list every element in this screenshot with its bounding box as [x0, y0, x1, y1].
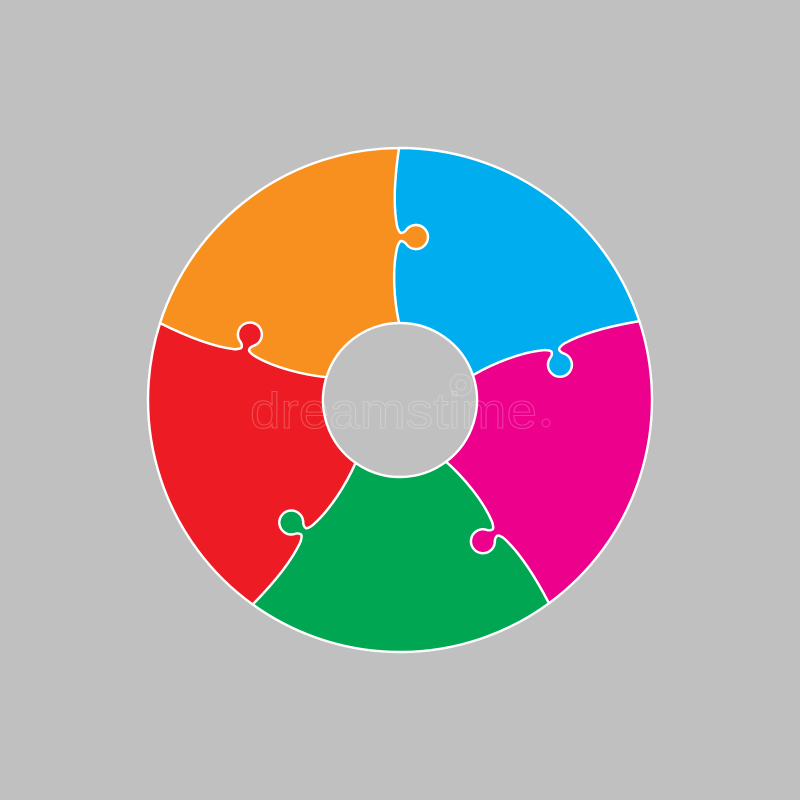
- puzzle piece: green: [220, 415, 553, 745]
- watermark spiral: [450, 374, 472, 396]
- watermark text: dreamstime: [250, 383, 537, 439]
- watermark registered mark: [542, 419, 550, 427]
- puzzle piece: magenta: [420, 317, 714, 620]
- puzzle piece: blue: [394, 148, 639, 377]
- puzzle piece: red: [58, 278, 391, 607]
- watermark: [250, 374, 550, 439]
- puzzle ring: [58, 95, 714, 745]
- puzzle piece: orange: [159, 95, 452, 398]
